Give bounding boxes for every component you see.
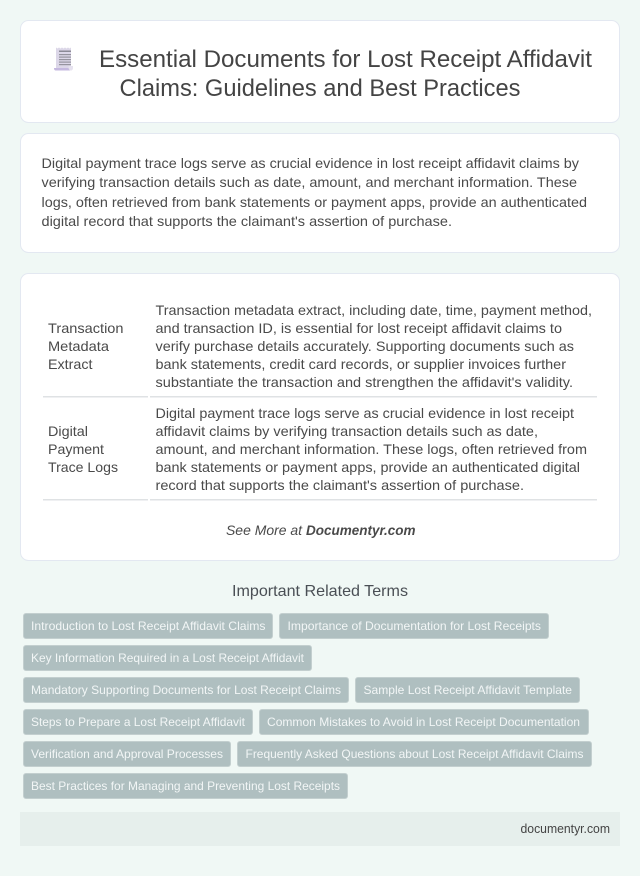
- title: Essential Documents for Lost Receipt Affidavit: [99, 46, 592, 73]
- panel: intro summary: [20, 134, 620, 252]
- tag: Key Information Required in a Lost Receipt Affidavit: [31, 651, 305, 665]
- table row: digital payment trace logs: amount, and merchant information. These logs, often retrieved from: [156, 441, 587, 457]
- tag: Best Practices for Managing and Preventing Lost Receipts: [31, 779, 340, 793]
- icon: receipt document: [54, 48, 73, 70]
- tag: Introduction to Lost Receipt Affidavit Claims: [31, 619, 266, 633]
- table row: digital payment trace logs: record that supports the claimant's assertion of purchase.: [156, 477, 524, 493]
- intro text block: digital record that supports the claimant's assertion of purchase.: [42, 213, 452, 229]
- see more link: [226, 522, 416, 538]
- tag: [238, 742, 592, 766]
- tag: Verification and Approval Processes: [31, 747, 223, 761]
- tag: Sample Lost Receipt Affidavit Template: [364, 683, 572, 697]
- table row: transaction metadata extract: Metadata: [48, 338, 109, 354]
- tag: Importance of Documentation for Lost Receipts: [288, 619, 541, 633]
- intro text block: [42, 155, 587, 229]
- table row: transaction metadata extract: bank statements, credit card records, or supplier invoices further: [156, 356, 566, 372]
- table row: digital payment trace logs: Digital: [48, 423, 88, 439]
- tag: [24, 774, 348, 798]
- tag: [24, 710, 252, 734]
- table row: transaction metadata extract: Extract: [48, 356, 93, 372]
- table row: transaction metadata extract: Transaction metadata extract, including date, time, payment method,: [156, 302, 592, 318]
- see more link: See More at: [226, 522, 303, 538]
- footer bar: [20, 812, 620, 846]
- title: [99, 46, 592, 102]
- tag: Common Mistakes to Avoid in Lost Receipt Documentation: [267, 715, 580, 729]
- tag: [356, 678, 580, 702]
- heading: important related terms: Important Related Terms: [232, 583, 408, 600]
- table row: transaction metadata extract: substantiate the transaction and strengthen the affidavit's validity.: [156, 374, 573, 390]
- intro text block: Digital payment trace logs serve as crucial evidence in lost receipt affidavit claims by: [42, 155, 579, 171]
- table row: digital payment trace logs: [43, 405, 597, 500]
- tag: [280, 614, 548, 638]
- related terms tags: [24, 614, 592, 798]
- tag: [24, 614, 272, 638]
- intro text block: verifying transaction details such as date, amount, and merchant information. These: [42, 174, 577, 190]
- table row: digital payment trace logs: Digital payment trace logs serve as crucial evidence in lost receipt: [156, 405, 574, 421]
- table row: transaction metadata extract: verify purchase details accurately. Supporting documents such as: [156, 338, 574, 354]
- table row: digital payment trace logs: Trace Logs: [48, 459, 118, 475]
- tag: Steps to Prepare a Lost Receipt Affidavit: [31, 715, 246, 729]
- table row: transaction metadata extract: Transaction: [48, 320, 124, 336]
- table row: digital payment trace logs: affidavit claims by verifying transaction details such as date,: [156, 423, 538, 439]
- tag: [24, 742, 230, 766]
- intro text block: logs, often retrieved from bank statements or payment apps, provide an authenticated: [42, 194, 587, 210]
- tag: Frequently Asked Questions about Lost Receipt Affidavit Claims: [246, 747, 584, 761]
- table row: digital payment trace logs: bank statements or payment apps, provide an authenticated digital: [156, 459, 580, 475]
- see more link: Documentyr.com: [306, 522, 416, 538]
- panel: document table: [20, 274, 620, 560]
- tag: [260, 710, 588, 734]
- table row: transaction metadata extract: [43, 302, 597, 398]
- table row: digital payment trace logs: Payment: [48, 441, 104, 457]
- tag: [24, 646, 312, 670]
- table row: transaction metadata extract: and transaction ID, is essential for lost receipt affidavit claims to: [156, 320, 562, 336]
- title: Claims: Guidelines and Best Practices: [120, 75, 520, 102]
- panel: title header: [20, 20, 620, 122]
- footer bar: documentyr.com: [520, 822, 610, 836]
- tag: [24, 678, 348, 702]
- tag: Mandatory Supporting Documents for Lost Receipt Claims: [31, 683, 341, 697]
